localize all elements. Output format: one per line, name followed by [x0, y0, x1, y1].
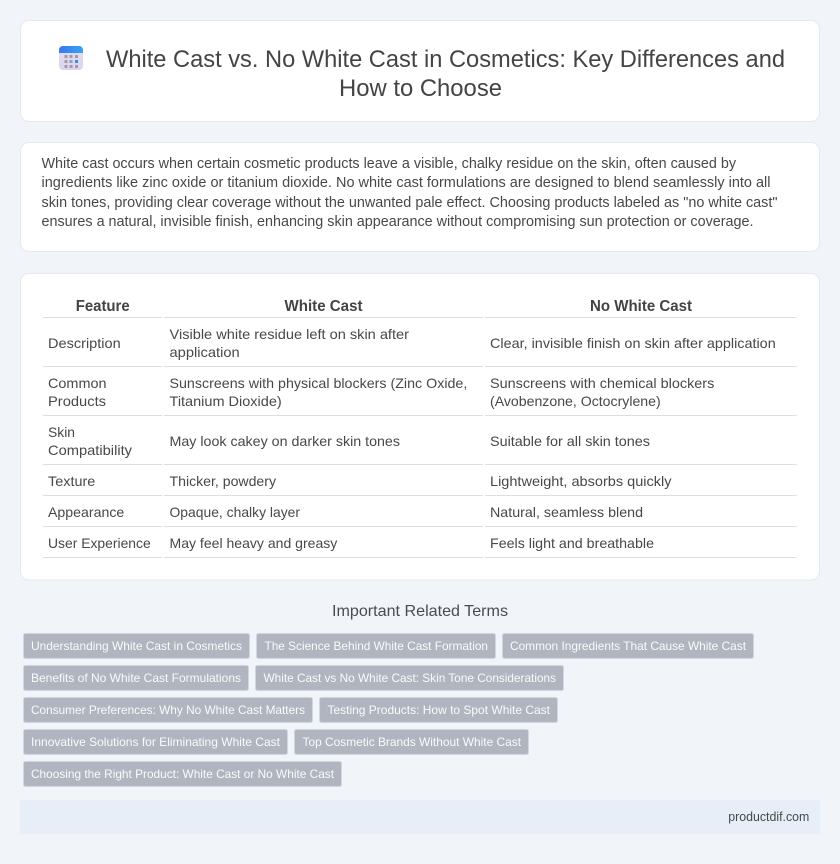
row: common products: Sunscreens with chemical blockers: [490, 375, 714, 391]
tag: [502, 634, 754, 658]
tag: Choosing the Right Product: White Cast or No White Cast: [31, 767, 335, 781]
row: texture: [48, 473, 672, 489]
row: appearance: Appearance: [48, 504, 125, 520]
row: common products: Sunscreens with physical blockers (Zinc Oxide,: [170, 375, 467, 391]
row: common products: Titanium Dioxide): [170, 393, 282, 409]
table header: Feature: [76, 298, 130, 315]
row: appearance: [48, 504, 643, 520]
row: user experience: [48, 535, 654, 551]
panel: introduction text: [20, 142, 820, 252]
row: common products: (Avobenzone, Octocrylene): [490, 393, 661, 409]
tag: [24, 634, 250, 658]
heading: title text: How to Choose: [339, 75, 502, 102]
row: texture: Thicker, powdery: [170, 473, 276, 489]
tag: White Cast vs No White Cast: Skin Tone Considerations: [264, 671, 556, 685]
tag: [294, 730, 528, 754]
tag: [24, 762, 342, 786]
heading: title text: White Cast vs. No White Cast in Cosmetics: Key Differences and: [106, 46, 785, 73]
tag: Testing Products: How to Spot White Cast: [328, 703, 551, 717]
row: skin compatibility: [48, 424, 650, 458]
tag: Top Cosmetic Brands Without White Cast: [302, 735, 522, 749]
tag: The Science Behind White Cast Formation: [264, 639, 488, 653]
footer: productdif.com: [728, 810, 809, 824]
tag: [24, 666, 248, 690]
footer: [20, 800, 820, 834]
row: skin compatibility: Suitable for all skin tones: [490, 433, 650, 449]
panel: introduction text: White cast occurs when certain cosmetic products leave a visible, chalky residue on the skin, often caused by: [42, 156, 737, 172]
row: common products: [48, 375, 714, 409]
row: description: Description: [48, 335, 121, 351]
heading: important related terms: Important Related Terms: [332, 603, 508, 620]
heading: title text: [106, 46, 785, 102]
row: texture: Texture: [48, 473, 96, 489]
row: user experience: Feels light and breathable: [490, 535, 654, 551]
tag: [320, 698, 558, 722]
tag: [256, 666, 564, 690]
tag: Benefits of No White Cast Formulations: [31, 671, 241, 685]
row: common products: Common: [48, 375, 106, 391]
tag: Consumer Preferences: Why No White Cast Matters: [31, 703, 305, 717]
row: user experience: User Experience: [48, 535, 151, 551]
row: description: application: [170, 344, 240, 360]
tag: [24, 698, 312, 722]
tag: [256, 634, 496, 658]
tag: Innovative Solutions for Eliminating White Cast: [31, 735, 281, 749]
row: appearance: Opaque, chalky layer: [170, 504, 300, 520]
row: description: Visible white residue left on skin after: [170, 326, 409, 342]
table header: [76, 298, 693, 315]
panel: introduction text: ingredients like zinc oxide or titanium dioxide. No white cast formulations are designed to blend seamlessly into all: [42, 175, 770, 191]
row: appearance: Natural, seamless blend: [490, 504, 643, 520]
panel: comparison table: [20, 274, 820, 580]
tag: [24, 730, 288, 754]
row: description: [48, 326, 776, 360]
panel: introduction text: ensures a natural, invisible finish, enhancing skin appearance without compromising sun protection or coverage.: [42, 214, 754, 230]
row: skin compatibility: May look cakey on darker skin tones: [170, 433, 400, 449]
table header: No White Cast: [590, 298, 693, 315]
row: common products: Products: [48, 393, 106, 409]
icon: calendar: [59, 46, 83, 70]
panel: related term tags: [24, 634, 754, 786]
row: description: Clear, invisible finish on skin after application: [490, 335, 776, 351]
row: skin compatibility: Compatibility: [48, 442, 132, 458]
panel: introduction text: skin tones, providing clear coverage without the unwanted pale effect. Choosing products labeled as "no white cast": [42, 195, 778, 211]
panel: title: [20, 20, 820, 122]
row: user experience: May feel heavy and greasy: [170, 535, 337, 551]
row: texture: Lightweight, absorbs quickly: [490, 473, 672, 489]
tag: Common Ingredients That Cause White Cast: [510, 639, 747, 653]
table header: White Cast: [284, 298, 363, 315]
row: skin compatibility: Skin: [48, 424, 75, 440]
tag: Understanding White Cast in Cosmetics: [31, 639, 242, 653]
